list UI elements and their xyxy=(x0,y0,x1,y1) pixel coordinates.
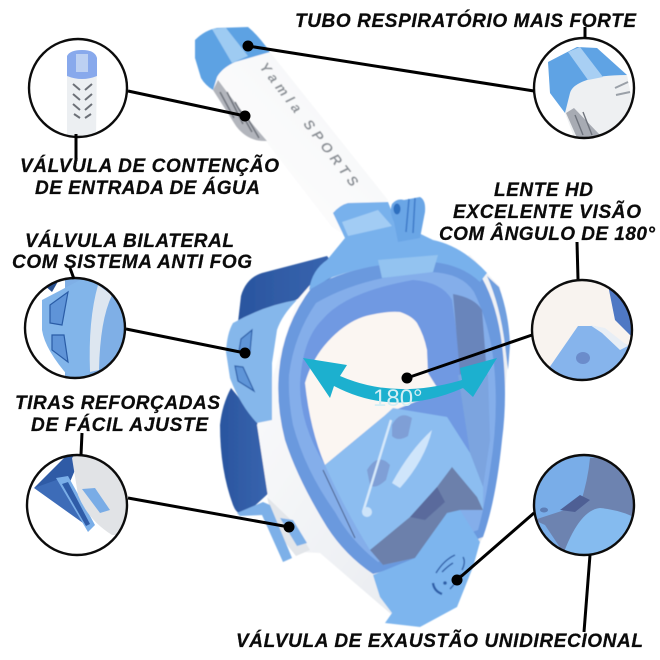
label xyxy=(12,230,252,273)
label: TUBO RESPIRATÓRIO MAIS FORTE xyxy=(295,10,637,32)
callout: bilateral anti-fog valve xyxy=(12,230,252,378)
inset: valve detail xyxy=(67,50,97,136)
illustration: full-face snorkel mask xyxy=(195,27,510,627)
inset: strap buckle xyxy=(34,456,126,535)
tube vents xyxy=(213,80,267,141)
label: DE FÁCIL AJUSTE xyxy=(31,414,209,436)
label: VÁLVULA DE EXAUSTÃO UNIDIRECIONAL xyxy=(236,630,643,652)
lower dark band xyxy=(370,467,483,565)
tube cap xyxy=(195,27,270,90)
inset: side valve xyxy=(42,279,124,377)
inner arch panel xyxy=(300,280,484,465)
label xyxy=(439,180,655,245)
label xyxy=(20,155,279,199)
callout: HD lens xyxy=(402,180,655,385)
label: TIRAS REFORÇADAS xyxy=(15,393,220,414)
inset: tube cap xyxy=(548,47,632,137)
180 degree arrow: 180° xyxy=(373,385,423,412)
label: DE ENTRADA DE ÁGUA xyxy=(35,177,260,199)
callout: stronger breathing tube xyxy=(242,10,640,140)
strap buckle xyxy=(237,497,310,562)
white mask shell xyxy=(257,255,510,615)
label: VÁLVULA BILATERAL xyxy=(25,230,234,252)
label: COM ÂNGULO DE 180° xyxy=(439,223,655,245)
nose cup xyxy=(323,408,483,565)
label: COM SISTEMA ANTI FOG xyxy=(12,252,252,273)
label: EXCELENTE VISÃO xyxy=(453,201,641,223)
snorkel tube xyxy=(195,27,388,235)
lens frame xyxy=(278,258,505,574)
callout: one-way exhaust valve xyxy=(236,455,643,652)
right side strip xyxy=(487,276,510,370)
inset: lens and chin detail xyxy=(535,456,633,554)
inset: lens detail xyxy=(533,282,631,379)
chin exhaust valve xyxy=(373,510,480,627)
label: VÁLVULA DE CONTENÇÃO xyxy=(20,155,279,177)
mask strap xyxy=(220,256,340,514)
tube brand text: Yamla SPORTS xyxy=(257,59,362,190)
callout: inlet check valve xyxy=(20,39,279,199)
right mesh area xyxy=(453,294,487,375)
callout: reinforced straps xyxy=(15,393,294,555)
top collar and camera mount xyxy=(309,197,487,290)
label xyxy=(15,393,220,436)
side valve xyxy=(226,300,297,423)
label: LENTE HD xyxy=(494,180,593,201)
180 degree arrow xyxy=(303,358,497,412)
viewing window xyxy=(305,312,440,465)
